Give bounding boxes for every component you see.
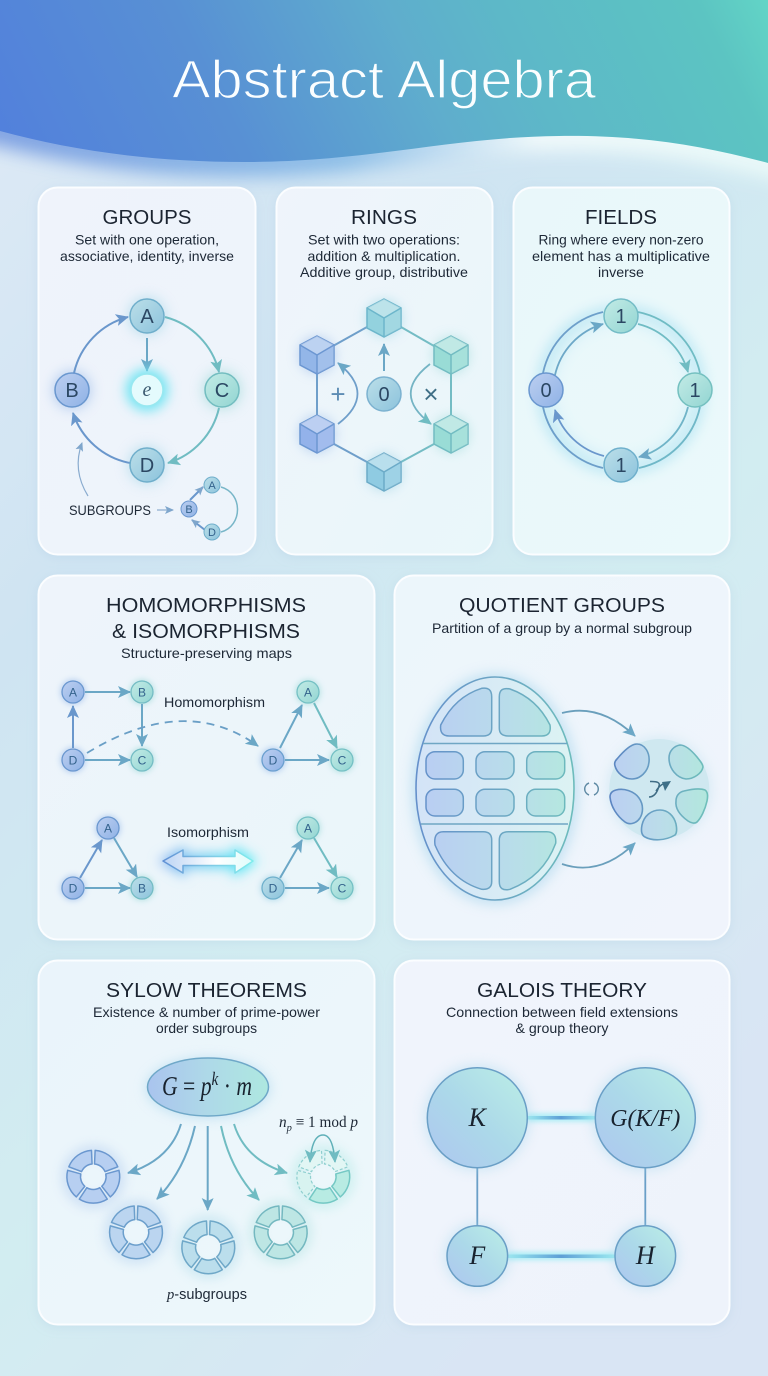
diagram: cyclic group: D	[140, 455, 154, 477]
node: one bottom	[604, 448, 638, 482]
node: one right	[678, 373, 712, 407]
p-subgroup ring 3	[179, 1218, 238, 1274]
heading: sylow theorems: SYLOW THEOREMS	[106, 980, 307, 1002]
node: one bottom: 1	[615, 455, 627, 477]
diagram: isomorphism source: B	[138, 882, 146, 896]
node: K: K	[468, 1103, 488, 1132]
description: galois theory: & group theory	[516, 1020, 608, 1036]
diagram: isomorphism source	[60, 815, 155, 901]
cube: top	[367, 299, 401, 337]
arrows: to p-subgroups	[128, 1124, 287, 1210]
addition arrow	[338, 363, 358, 424]
diagram: homomorphism source: A	[69, 686, 77, 700]
diagram: isomorphism source: D	[69, 882, 78, 896]
node: one top	[604, 299, 638, 333]
description: fields: inverse	[598, 264, 644, 280]
diagram: isomorphism source: A	[104, 822, 112, 836]
diagram: galois correspondence	[424, 1065, 698, 1289]
cube: bottom	[367, 453, 401, 491]
heading: homomorphisms	[106, 595, 306, 643]
icon: center arrow	[649, 781, 671, 797]
panel: quotient groups	[394, 576, 730, 940]
diagram: quotient group	[607, 737, 711, 841]
diagram: cyclic group: C	[215, 380, 229, 402]
heading: groups: GROUPS	[102, 207, 192, 229]
isomorphism label: Isomorphism	[167, 824, 249, 840]
diagram: homomorphism target: A	[304, 686, 312, 700]
diagram: isomorphism target: D	[269, 882, 278, 896]
panel: groups	[38, 188, 256, 554]
multiplication arrow	[411, 364, 431, 424]
node: zero	[529, 373, 563, 407]
heading: homomorphisms: & ISOMORPHISMS	[112, 621, 300, 643]
description: fields: Ring where every non-zero	[538, 232, 704, 248]
diagram: homomorphism source: D	[69, 754, 78, 768]
subgroups label: SUBGROUPS	[69, 502, 151, 518]
panel: rings	[276, 188, 492, 554]
upper map arrow	[562, 711, 635, 736]
double arrow: isomorphism	[163, 850, 253, 873]
panel: fields	[514, 188, 730, 554]
diagram: isomorphism target: A	[304, 822, 312, 836]
plus sign: +	[330, 379, 346, 409]
heading: fields: FIELDS	[585, 207, 657, 229]
description: sylow theorems	[93, 1004, 320, 1036]
diagram: isomorphism target: C	[338, 882, 347, 896]
link: field to group	[527, 1114, 595, 1121]
homomorphism label: Homomorphism	[164, 694, 265, 710]
node: one top: 1	[615, 306, 627, 328]
diagram: homomorphism source	[60, 679, 155, 773]
diagram: cyclic group: B	[65, 380, 79, 402]
congruence label: n	[279, 1114, 287, 1131]
description: groups: associative, identity, inverse	[60, 248, 234, 264]
diagram: cyclic group	[52, 296, 242, 485]
heading: quotient groups: QUOTIENT GROUPS	[459, 595, 665, 617]
title: Abstract Algebra	[172, 50, 597, 110]
panel: sylow theorems	[38, 960, 374, 1324]
diagram: subgroup: A	[208, 480, 216, 492]
node: G(K/F): G(K/F)	[610, 1106, 680, 1132]
diagram: field ring	[529, 299, 712, 482]
formula: group order	[146, 1058, 270, 1118]
node: K	[424, 1065, 530, 1171]
node: G(K/F)	[592, 1065, 698, 1171]
formula: group order: m	[236, 1071, 252, 1101]
cube: lower right	[434, 415, 468, 453]
panel: galois theory	[394, 960, 730, 1324]
description: quotient groups: Partition of a group by a normal subgroup	[432, 620, 692, 636]
description: fields: element has a multiplicative	[532, 248, 710, 264]
congruence label: ≡ 1 mod	[292, 1114, 350, 1131]
heading: homomorphisms: HOMOMORPHISMS	[106, 595, 306, 617]
link: subfield to subgroup	[507, 1252, 615, 1260]
lower map arrow	[562, 843, 635, 868]
cube: upper right	[434, 336, 468, 374]
p-subgroup ring 2	[107, 1203, 165, 1259]
formula: group order: G = p	[162, 1071, 214, 1101]
congruence arrows	[310, 1135, 335, 1162]
panel: homomorphisms and isomorphisms	[38, 576, 374, 940]
homomorphism map arrow	[87, 721, 258, 753]
subgroups label	[69, 443, 173, 518]
header banner	[0, 0, 768, 170]
description: sylow theorems: order subgroups	[156, 1020, 257, 1036]
diagram: subgroup: D	[208, 527, 216, 539]
p-subgroups label: p-subgroups	[166, 1286, 247, 1303]
diagram: ring hexagon	[299, 299, 469, 491]
diagram: subgroup: B	[185, 504, 193, 516]
p-subgroup ring 4	[251, 1203, 310, 1259]
icon: cycle	[585, 783, 598, 795]
zero node	[367, 377, 401, 411]
node: one right: 1	[689, 380, 701, 402]
identity node: e	[143, 379, 152, 401]
description: homomorphisms: Structure-preserving maps	[121, 645, 292, 661]
congruence label: p	[349, 1114, 358, 1131]
heading: galois theory: GALOIS THEORY	[477, 980, 647, 1002]
p-subgroup ring 1	[64, 1147, 123, 1203]
diagram: partitioned group	[411, 673, 579, 905]
description: galois theory	[446, 1004, 678, 1036]
times sign: ×	[423, 379, 439, 409]
congruence label: p	[286, 1122, 292, 1134]
description: fields	[532, 232, 710, 280]
diagram: homomorphism source: C	[138, 754, 147, 768]
node: zero: 0	[540, 380, 552, 402]
formula: group order: k	[212, 1069, 219, 1090]
zero arrow	[383, 344, 385, 371]
description: sylow theorems: Existence & number of prime-power	[93, 1004, 320, 1020]
heading: rings: RINGS	[351, 207, 417, 229]
diagram: subgroup	[181, 477, 238, 540]
diagram: homomorphism target: D	[269, 754, 278, 768]
zero node: 0	[378, 384, 390, 406]
node: F: F	[468, 1241, 486, 1270]
description: rings: Set with two operations:	[308, 232, 460, 248]
identity node	[126, 369, 168, 411]
diagram: homomorphism target	[260, 679, 355, 773]
diagram: isomorphism target	[260, 815, 355, 901]
diagram: homomorphism target: C	[338, 754, 347, 768]
description: groups	[60, 232, 234, 264]
diagram: homomorphism source: B	[138, 686, 146, 700]
description: rings: addition & multiplication.	[308, 248, 460, 264]
description: galois theory: Connection between field extensions	[446, 1004, 678, 1020]
p-subgroup ring 5	[294, 1147, 353, 1203]
description: groups: Set with one operation,	[75, 232, 219, 248]
node: H	[612, 1223, 678, 1289]
cube: lower left	[300, 415, 334, 453]
node: H: H	[635, 1241, 656, 1270]
description: rings: Additive group, distributive	[300, 264, 468, 280]
diagram: cyclic group: A	[140, 306, 154, 328]
cube: upper left	[300, 336, 334, 374]
node: F	[444, 1223, 510, 1289]
description: rings	[300, 232, 468, 280]
formula: group order: ·	[218, 1071, 236, 1101]
